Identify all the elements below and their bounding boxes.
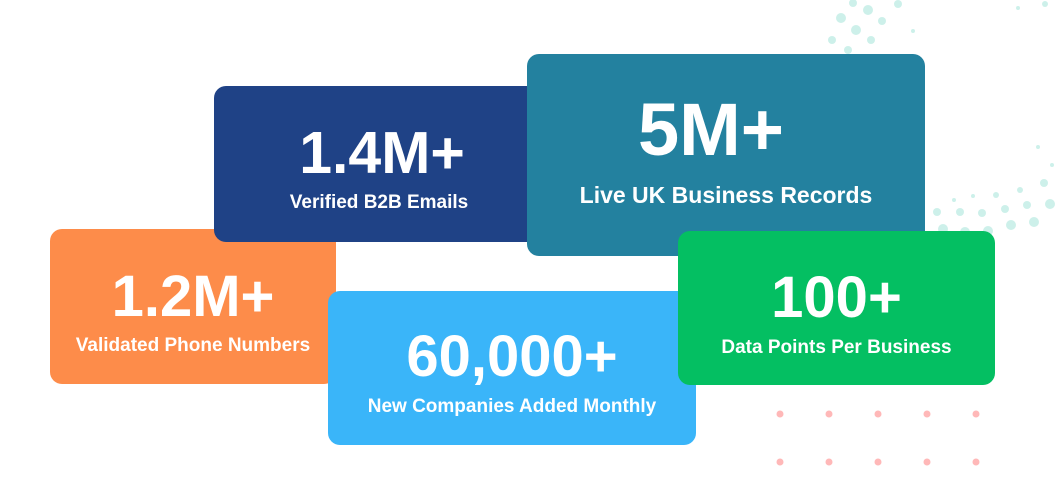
- card: emails: [214, 86, 544, 242]
- card: business records: [527, 54, 925, 256]
- card: data points: Data Points Per Business: [721, 337, 952, 358]
- card: business records: Live UK Business Records: [580, 182, 872, 208]
- card: new companies: [328, 291, 696, 445]
- card: phone numbers: 1.2M+: [112, 264, 274, 329]
- card: data points: [678, 231, 995, 385]
- card: new companies: 60,000+: [406, 324, 618, 389]
- card: phone numbers: [50, 229, 336, 384]
- card: new companies: New Companies Added Monthly: [368, 396, 656, 417]
- card: phone numbers: Validated Phone Numbers: [76, 335, 310, 356]
- card: business records: 5M+: [638, 88, 784, 171]
- card: emails: Verified B2B Emails: [290, 192, 468, 213]
- card: data points: 100+: [771, 265, 902, 330]
- card: emails: 1.4M+: [299, 120, 465, 186]
